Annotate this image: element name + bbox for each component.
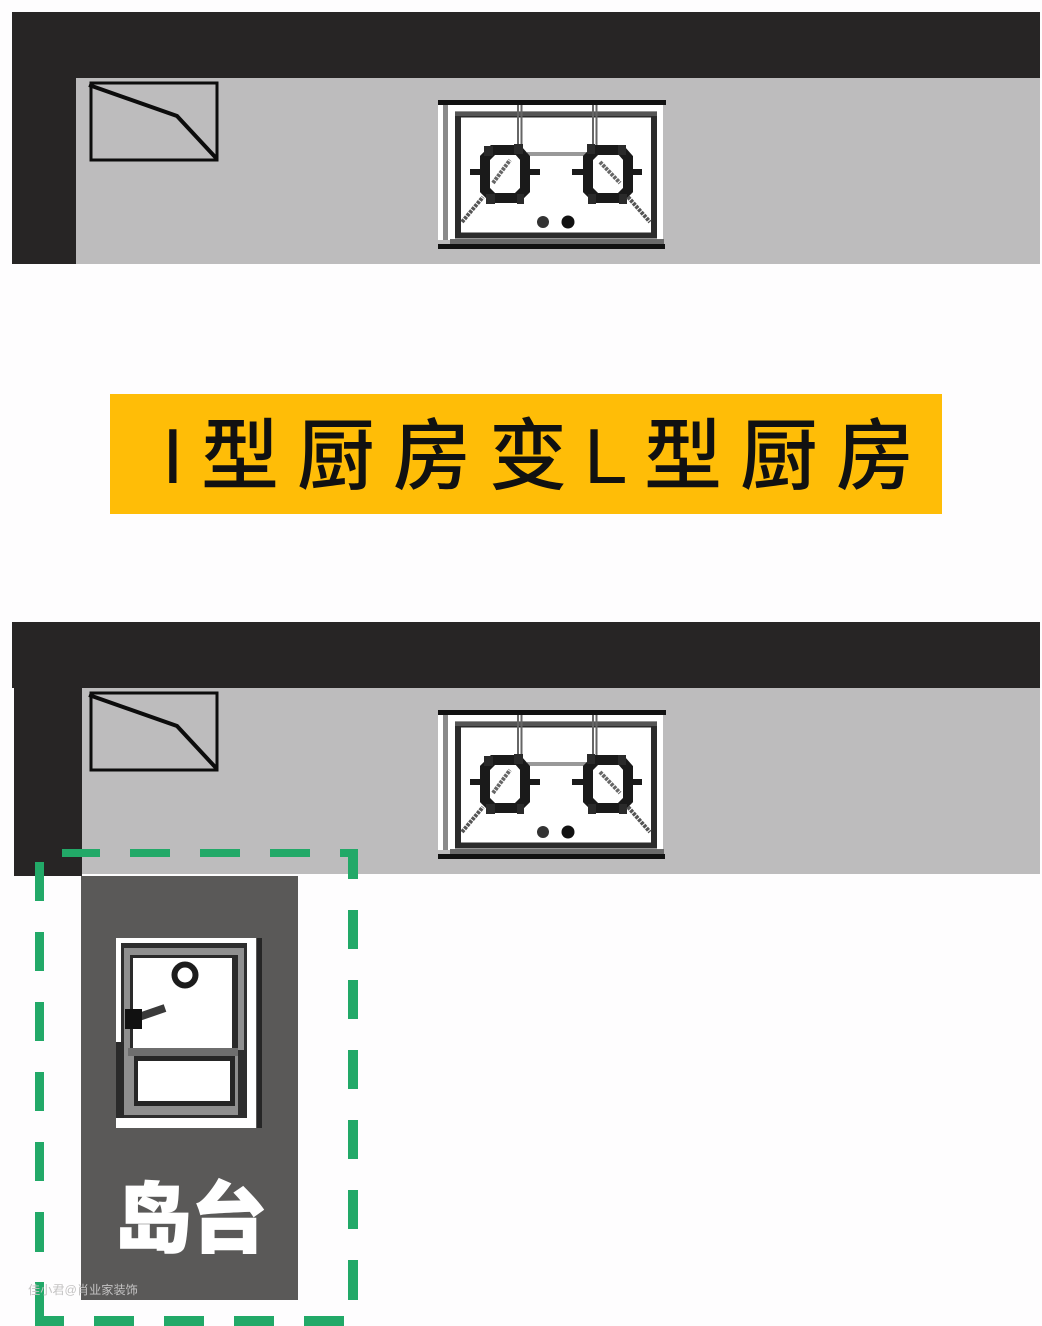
title banner: 房: [836, 412, 914, 500]
countertop: [82, 688, 1040, 874]
walls: [12, 12, 1040, 264]
countertop: [76, 78, 1040, 264]
title banner: 厨: [740, 412, 818, 500]
icon: island sink: [116, 938, 262, 1128]
panel: I-shaped kitchen plan: [12, 12, 1040, 264]
title banner: 厨: [297, 412, 375, 500]
title banner: L: [584, 412, 627, 500]
panel: island: [81, 876, 298, 1300]
label: island: 岛台: [115, 1178, 267, 1263]
walls: [12, 622, 1040, 876]
title banner: [110, 394, 942, 514]
title banner: 型: [644, 412, 722, 500]
watermark: 佳小君@肖业家装饰: [28, 1282, 138, 1297]
title banner: I: [162, 412, 184, 500]
icon: sink outline: [89, 83, 217, 160]
icon: sink outline: [89, 693, 217, 770]
highlight: dashed green frame: [35, 849, 358, 1326]
title banner: 变: [489, 412, 567, 500]
panel: L-shaped kitchen plan: [12, 622, 1040, 876]
title banner: 房: [393, 412, 471, 500]
icon: gas hob: [438, 100, 666, 249]
island counter: [81, 876, 298, 1300]
title banner: 型: [201, 412, 279, 500]
icon: gas hob: [438, 710, 666, 859]
